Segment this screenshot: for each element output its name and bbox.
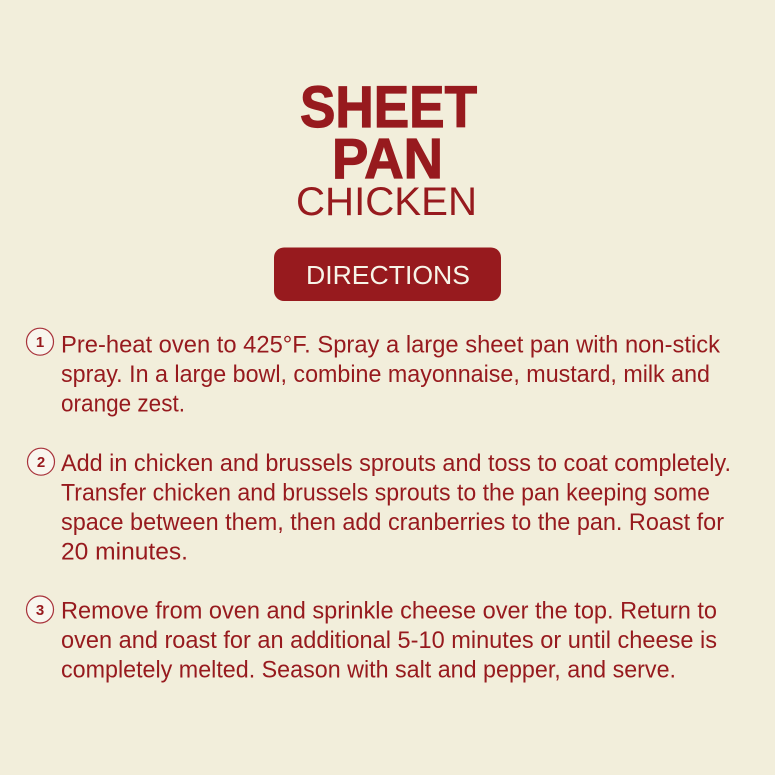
title: SHEET — [300, 75, 477, 140]
title: PAN — [332, 127, 443, 191]
icon: step number 3: 3 — [36, 602, 44, 619]
step 3 text: completely melted. Season with salt and pepper, and serve. — [61, 656, 676, 684]
step 2 text: 20 minutes. — [61, 538, 188, 566]
step 2 text: Add in chicken and brussels sprouts and toss to coat completely. — [61, 450, 731, 477]
icon: step number 2 — [28, 448, 54, 475]
step 1 — [26, 328, 721, 418]
step 3 text — [61, 598, 717, 684]
step 2 text: Transfer chicken and brussels sprouts to the pan keeping some — [61, 480, 710, 506]
step 3 text: oven and roast for an additional 5-10 minutes or until cheese is — [61, 627, 717, 654]
step 2 text — [61, 450, 731, 566]
directions heading button: DIRECTIONS — [306, 260, 470, 290]
step 1 text — [61, 332, 721, 418]
title — [296, 75, 477, 224]
icon: step number 2: 2 — [37, 454, 45, 471]
icon: step number 3 — [26, 596, 54, 623]
icon: step number 1 — [26, 328, 54, 355]
icon: step number 1: 1 — [36, 334, 44, 351]
step 1 text: orange zest. — [61, 390, 185, 418]
title: CHICKEN — [296, 180, 477, 224]
step 1 text: Pre-heat oven to 425°F. Spray a large sheet pan with non-stick — [61, 332, 721, 358]
step 3 text: Remove from oven and sprinkle cheese over the top. Return to — [61, 598, 717, 624]
step 2 text: space between them, then add cranberries to the pan. Roast for — [61, 509, 724, 536]
step 2 — [28, 448, 731, 566]
step 3 — [26, 596, 717, 684]
directions heading button — [274, 248, 501, 301]
step 1 text: spray. In a large bowl, combine mayonnaise, mustard, milk and — [61, 361, 710, 388]
